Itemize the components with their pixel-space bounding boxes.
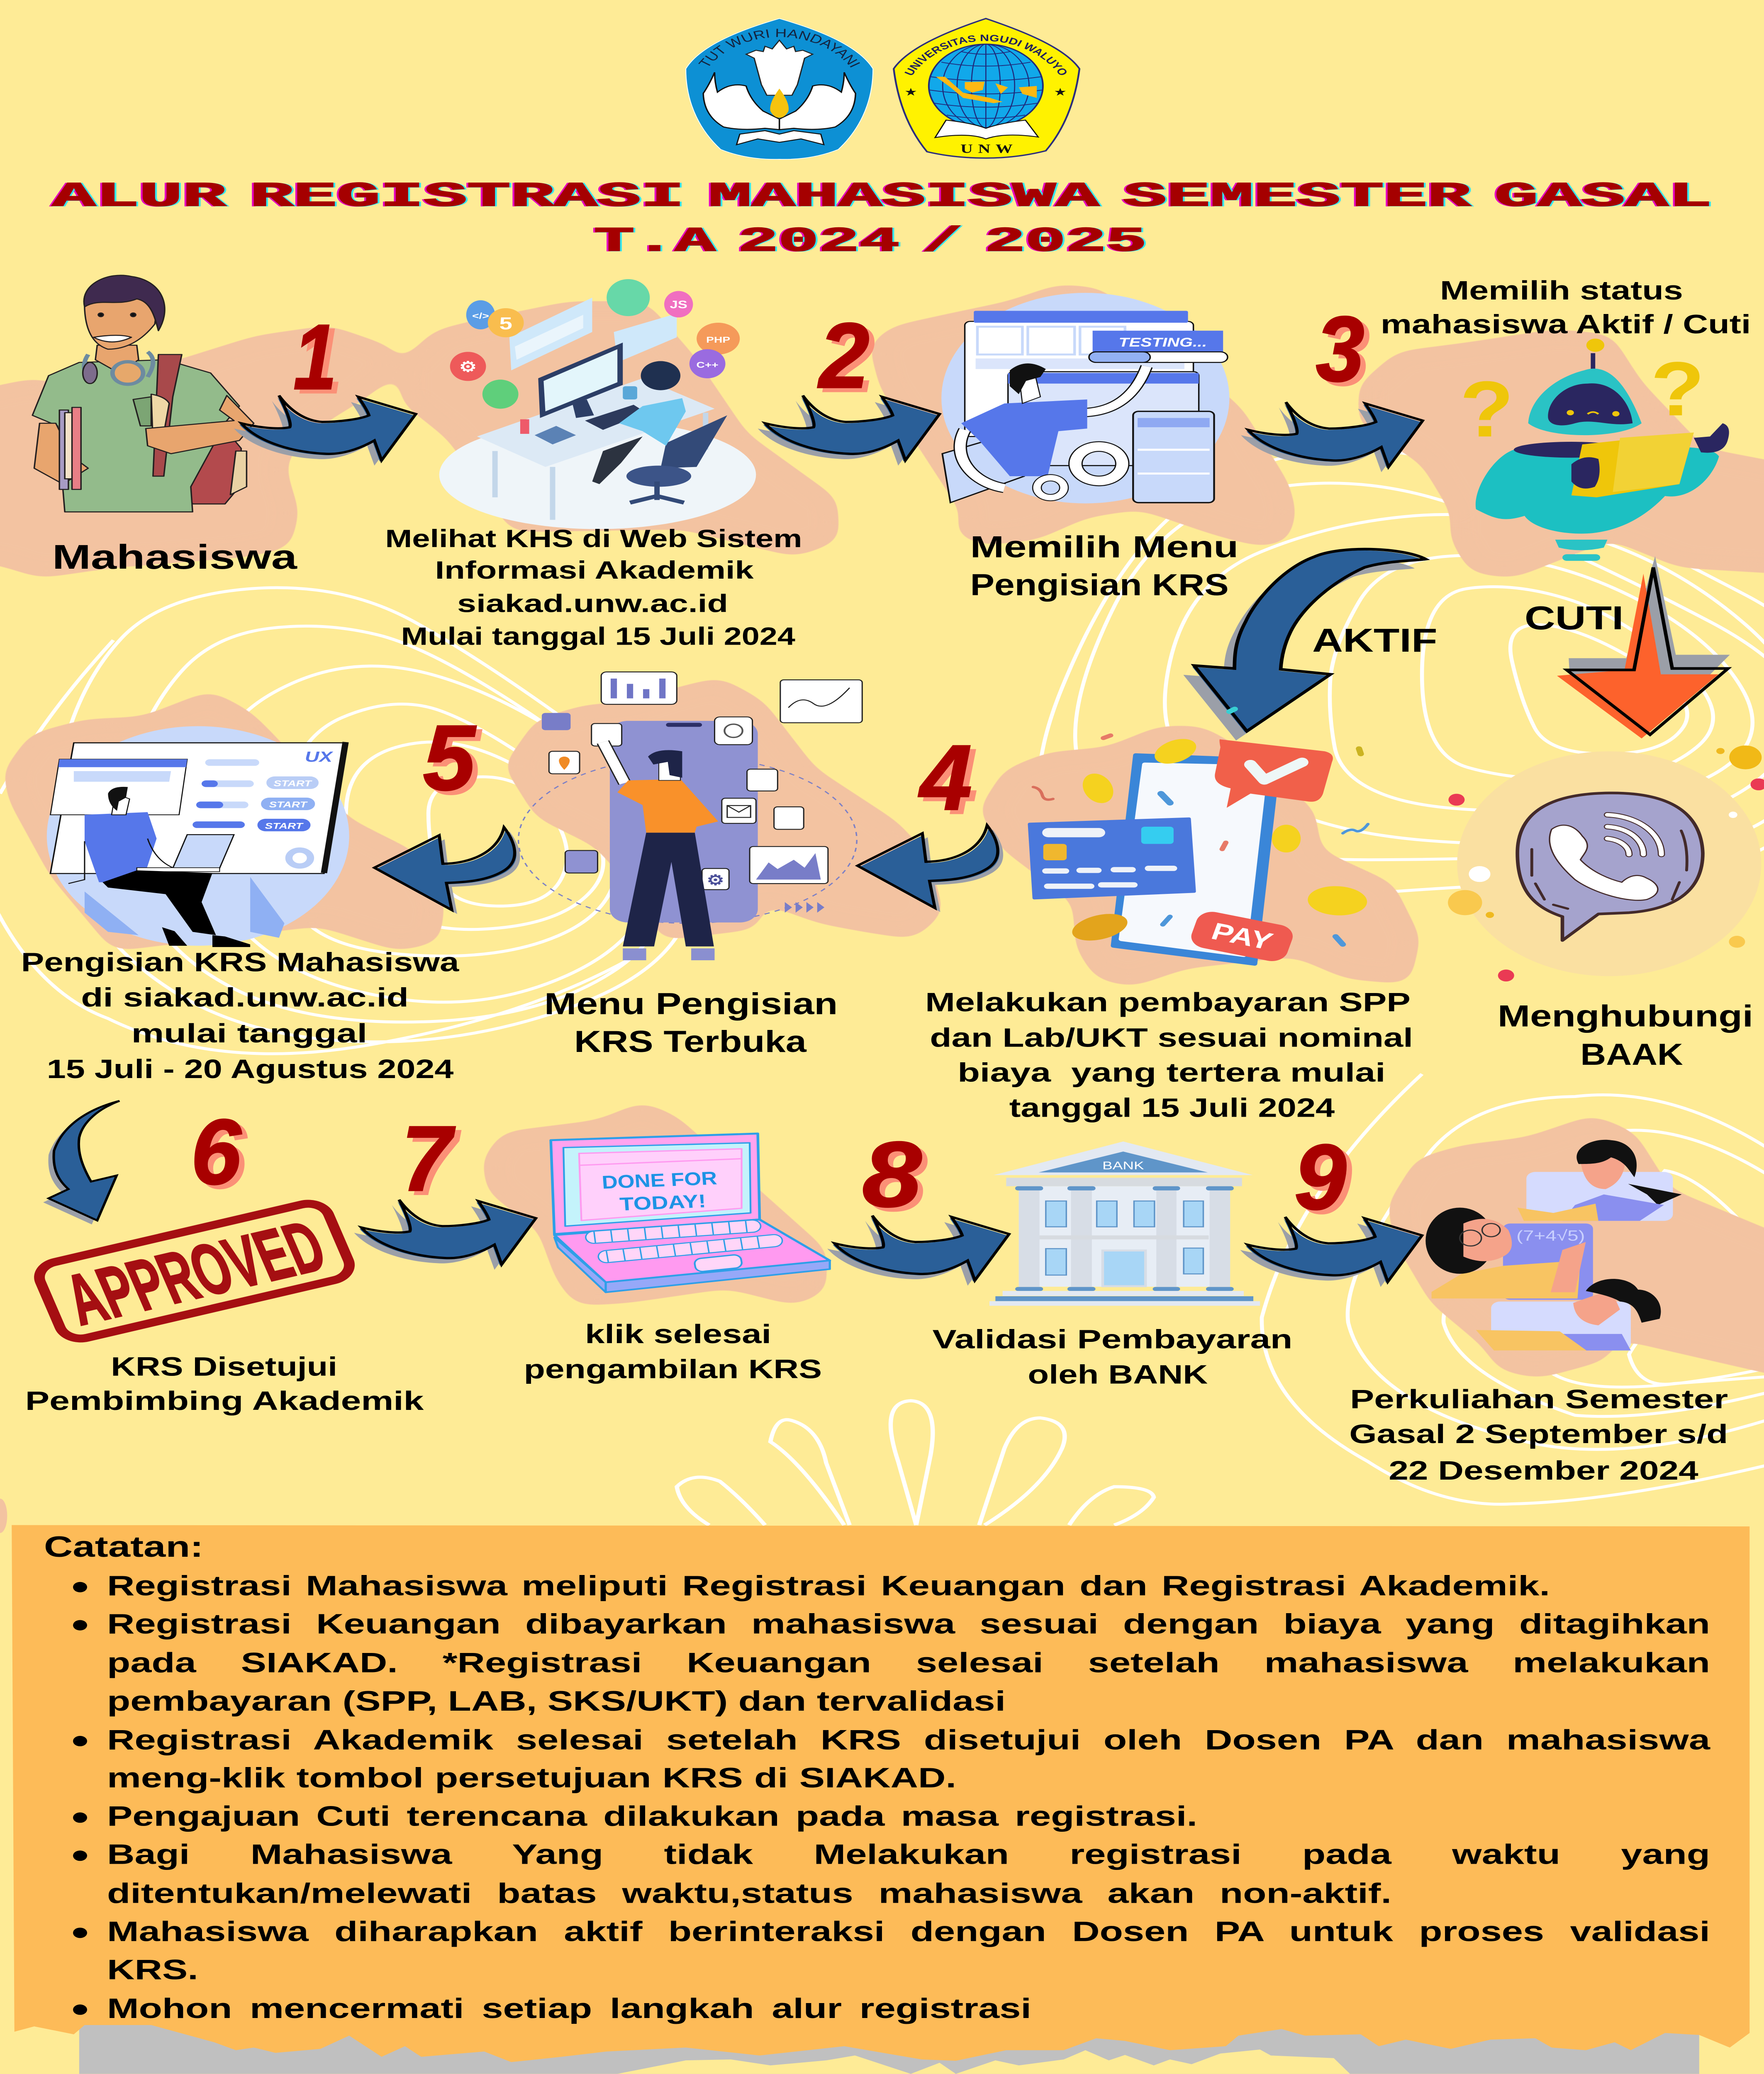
illustration: robot with question marks: ? [1651,346,1705,432]
label: KRS Disetujui: KRS Disetujui [111,1352,337,1382]
blob: payment [979,726,1420,987]
logo: Tut Wuri Handayani: TUT WURI HANDAYANI [695,27,863,70]
illustration: KRS menu phone [519,672,862,960]
blob: KRS menu [504,677,943,940]
label: Pengisian KRS Mahasiswa: Pengisian KRS Mahasiswa [21,948,459,977]
contour lines: left set [0,588,694,1054]
label: Perkuliahan Semester: 22 Desember 2024 [1389,1456,1698,1485]
number 3: 3 [1316,297,1364,401]
number 4: 4 [917,726,972,829]
illustration: choosing menu [941,293,1229,504]
arrow: down to approved [43,1101,119,1224]
blob: menu [870,285,1296,546]
label: Menghubungi BAAK: Menghubungi [1498,999,1753,1033]
salmon edge accent [0,1499,7,1533]
arrow: cuti [1557,556,1730,738]
contour lines: bottom right set [1262,1074,1764,1504]
label: Melihat KHS: Informasi Akademik [435,556,754,584]
label: Pengisian KRS Mahasiswa: mulai tanggal [132,1019,367,1048]
label: Memilih Menu [970,530,1238,602]
label: Perkuliahan Semester: Gasal 2 September s/d [1349,1419,1728,1449]
illustration: student at computer: </> [472,312,489,321]
blob: student [0,325,396,578]
number 8: 8 [862,1123,922,1226]
illustration: student at computer: C++ [696,360,719,370]
label: Menghubungi BAAK [1498,999,1753,1071]
blob: robot [1359,329,1764,578]
illustration: KRS menu phone: ⚙ [707,871,724,888]
label: Menu Pengisian KRS Terbuka: KRS Terbuka [574,1025,807,1059]
note 5: Bagi Mahasiswa Yang tidak Melakukan registrasi pada waktu yang [107,1839,1710,1870]
illustration: student at computer [439,279,756,529]
illustration: laptop done for today [551,1134,830,1292]
number 1: 1 [293,305,336,409]
label: Melihat KHS: Melihat KHS di Web Sistem [385,525,802,553]
number 9: 9 [1294,1126,1347,1229]
illustration: student at computer: JS [670,299,687,311]
blob: laptop [482,1102,826,1305]
number 5: 5 [423,706,477,809]
illustration: laptop done for today: TODAY! [619,1191,707,1215]
note 2: Registrasi Keuangan dibayarkan mahasiswa sesuai dengan biaya yang ditagihkan [107,1609,1710,1640]
label: Validasi Pembayaran: oleh BANK [1028,1360,1208,1390]
stamp: approved [34,1200,356,1344]
illustration: online class: (7+4√5) [1516,1227,1585,1244]
illustration: student at computer: 5 [499,314,512,333]
flower outline above notes [677,1401,1154,1525]
arrow: step 7 [354,1200,536,1270]
label: klik selesai [524,1319,822,1384]
label: Memilih status: Memilih status [1440,276,1683,305]
label: Pengisian KRS Mahasiswa [21,948,459,1084]
label: Melakukan pembayaran: biaya yang tertera mulai [958,1058,1386,1088]
illustration: bank [989,1142,1260,1306]
label: Melakukan pembayaran: Melakukan pembayaran SPP [925,988,1411,1017]
label: AKTIF: AKTIF [1312,622,1438,659]
label: KRS Disetujui [25,1352,424,1416]
label: Pengisian KRS Mahasiswa: 15 Juli - 20 Agustus 2024 [47,1054,453,1084]
illustration: robot with question marks: ? [1460,365,1514,453]
label: Mahasiswa: Mahasiswa [52,538,297,576]
number 2: 2 [818,304,870,407]
note 2 line 2: pada SIAKAD. *Registrasi Keuangan selesai setelah mahasiswa melakukan [107,1647,1710,1678]
arrow: step 1 [234,395,416,465]
label: Memilih status [1381,276,1751,339]
note 6: Mahasiswa diharapkan aktif berinteraksi dengan Dosen PA untuk proses validasi [107,1916,1710,1947]
illustration: KRS form: UX [305,749,334,765]
arrow: step 3 [1241,402,1423,472]
arrow: step 9 [1240,1217,1422,1287]
label: Memilih status: mahasiswa Aktif / Cuti [1381,309,1751,339]
label: Melakukan pembayaran: dan Lab/UKT sesuai nominal [930,1023,1413,1053]
panel: catatan background [12,1525,1749,2062]
label: Melakukan pembayaran [925,988,1413,1123]
note 4: Pengajuan Cuti terencana dilakukan pada masa registrasi. [107,1801,1197,1832]
logo: Tut Wuri Handayani [686,19,873,159]
torn paper edge over grey strip [617,2050,1350,2074]
illustration: bank: BANK [1102,1159,1144,1172]
number 6: 6 [191,1100,242,1204]
label: Validasi Pembayaran: Validasi Pembayaran [932,1325,1292,1354]
arrow: step 5 [374,828,520,914]
label: Validasi Pembayaran [932,1325,1292,1390]
illustration: KRS form [47,726,349,947]
note 3 line 2: meng-klik tombol persetujuan KRS di SIAKAD. [107,1762,956,1794]
blob: computer [402,302,839,557]
note 5 line 2: ditentukan/melewati batas waktu,status mahasiswa akan non-aktif. [107,1878,1391,1909]
note 1: Registrasi Mahasiswa meliputi Registrasi Keuangan dan Registrasi Akademik. [107,1570,1550,1602]
blob: KRS form [4,691,445,951]
heading: Catatan: Catatan: [44,1531,203,1563]
step numbers [191,297,1364,1229]
label: Pengisian KRS Mahasiswa: di siakad.unw.ac.id [81,983,409,1013]
number 7: 7 [402,1107,457,1210]
illustration: KRS form: START [269,800,308,810]
label: Melihat KHS: siakad.unw.ac.id [457,590,728,618]
logo: Universitas Ngudi Waluyo [894,19,1079,158]
label: Menu Pengisian KRS Terbuka [544,987,838,1059]
title [52,177,1712,261]
illustration: student at computer: ⚙ [459,358,477,375]
illustration: payment phone [1030,709,1369,964]
label: klik selesai: klik selesai [585,1319,771,1349]
label: klik selesai: pengambilan KRS [524,1355,822,1384]
note 3: Registrasi Akademik selesai setelah KRS disetujui oleh Dosen PA dan mahasiswa [107,1724,1710,1755]
contour lines: right set [1039,450,1764,902]
stamp: approved: APPROVED [54,1205,337,1340]
illustration: online class [1425,1140,1682,1351]
label: Perkuliahan Semester [1349,1385,1728,1485]
illustration: choosing menu: TESTING... [1118,335,1207,349]
note 6 line 2: KRS. [107,1954,198,1985]
illustration: robot with question marks [1460,338,1729,561]
title: ALUR REGISTRASI MAHASISWA SEMESTER GASAL [52,177,1712,216]
label: Melihat KHS: Mulai tanggal 15 Juli 2024 [401,623,795,650]
background blobs [0,285,1764,1389]
label: Menghubungi BAAK: BAAK [1580,1037,1683,1071]
illustration: KRS form: START [265,821,304,831]
illustration: payment phone: PAY [1208,918,1277,955]
illustration: student [32,275,254,512]
arrow: step 8 [827,1215,1009,1285]
note 2 line 3: pembayaran (SPP, LAB, SKS/UKT) dan tervalidasi [107,1686,1006,1717]
label: Melakukan pembayaran: tanggal 15 Juli 2024 [1009,1093,1335,1123]
label: Memilih Menu: Pengisian KRS [970,568,1229,602]
logo: Universitas Ngudi Waluyo: UNW [960,142,1013,156]
grey strip below notes [79,2021,1699,2074]
illustration: KRS form: START [273,779,312,789]
title: T.A 2024 / 2025 [594,222,1147,261]
logo: Universitas Ngudi Waluyo: UNIVERSITAS NGUDI WALUYO [902,33,1070,78]
arrow: aktif [1183,549,1425,740]
logo: Universitas Ngudi Waluyo: ★ [905,87,916,97]
label: CUTI: CUTI [1525,600,1624,637]
logo: Universitas Ngudi Waluyo: ★ [1055,87,1066,97]
arrow: step 4 [858,825,1003,912]
blob: class [1388,1115,1764,1389]
label: Memilih Menu: Memilih Menu [970,530,1238,564]
label: Melihat KHS [385,525,802,650]
label: KRS Disetujui: Pembimbing Akademik [25,1386,424,1416]
note 7: Mohon mencermati setiap langkah alur registrasi [107,1993,1031,2024]
illustration: Viber call circle [1448,745,1764,981]
illustration: student at computer: PHP [706,335,730,345]
arrow: step 2 [758,395,940,465]
label: Perkuliahan Semester: Perkuliahan Semester [1350,1385,1728,1414]
label: Menu Pengisian KRS Terbuka: Menu Pengisian [544,987,838,1021]
illustration: laptop done for today: DONE FOR [601,1168,718,1193]
